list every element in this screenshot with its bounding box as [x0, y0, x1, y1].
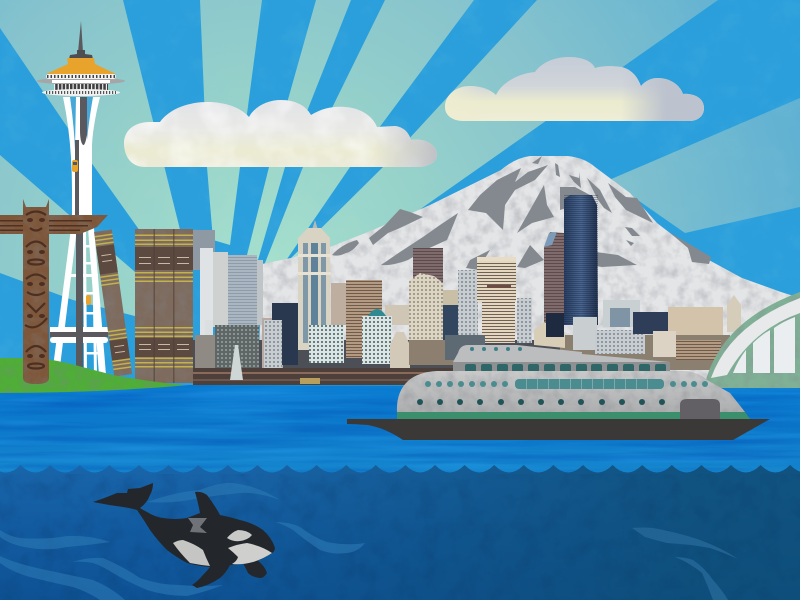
needle lower elevator	[86, 295, 91, 305]
ferry hull	[347, 419, 770, 440]
waterfront strip	[193, 368, 563, 385]
totem pole body	[23, 199, 49, 384]
bridge arch	[704, 292, 800, 388]
water: upper surface	[0, 380, 800, 475]
needle elevator shaft	[75, 140, 79, 228]
city filler mass	[193, 335, 730, 372]
city skyline	[193, 195, 741, 385]
sky texture	[0, 0, 800, 400]
grassy hill	[0, 358, 190, 396]
needle core shaft	[76, 228, 83, 368]
ferry main cabin	[397, 371, 745, 412]
ferry lower portholes	[417, 399, 665, 405]
ferry long window	[515, 379, 664, 389]
orca saddle patch	[188, 518, 207, 533]
ferry upper portholes	[425, 381, 708, 387]
buildings: back row	[193, 230, 564, 370]
needle spire	[78, 21, 83, 52]
totem carvings	[25, 212, 47, 368]
sky background	[0, 0, 800, 400]
ferry upper deck	[453, 345, 670, 372]
orca eye patch	[227, 530, 252, 541]
buildings: front row	[195, 273, 741, 375]
cloud: left	[124, 100, 437, 167]
totem wings	[0, 215, 108, 234]
orca	[93, 483, 275, 588]
water: underwater with scalloped waves	[0, 465, 800, 600]
ferry green stripe	[397, 412, 750, 419]
ferry	[347, 345, 770, 440]
tower: 1201 Third	[298, 220, 331, 350]
underwater current swirls	[0, 483, 365, 600]
ferris wheel	[230, 345, 243, 380]
orca belly patch	[228, 543, 272, 564]
needle saucer	[37, 74, 125, 96]
totem pole	[0, 199, 108, 384]
orca body	[93, 483, 275, 588]
tower: Columbia Center	[564, 195, 598, 325]
waterfront roof	[300, 378, 320, 384]
orca far fin	[243, 560, 267, 578]
needle waist	[63, 97, 100, 228]
sunburst rays	[0, 0, 800, 320]
three upright books	[135, 229, 193, 383]
needle elevator	[72, 160, 78, 172]
needle platform stripe	[50, 332, 108, 337]
needle waist core	[80, 97, 87, 145]
orca rear belly patch	[173, 540, 210, 566]
underwater swirls: right	[632, 528, 738, 600]
needle lower legs	[50, 228, 108, 375]
needle spire base	[69, 50, 93, 59]
leaning book	[94, 229, 132, 377]
needle waist gaps	[70, 97, 93, 150]
Space Needle	[37, 21, 125, 375]
needle orange roof	[46, 58, 116, 74]
cloud: right	[445, 57, 704, 121]
mountain: Rainier	[258, 156, 800, 385]
ferry door	[680, 399, 720, 419]
